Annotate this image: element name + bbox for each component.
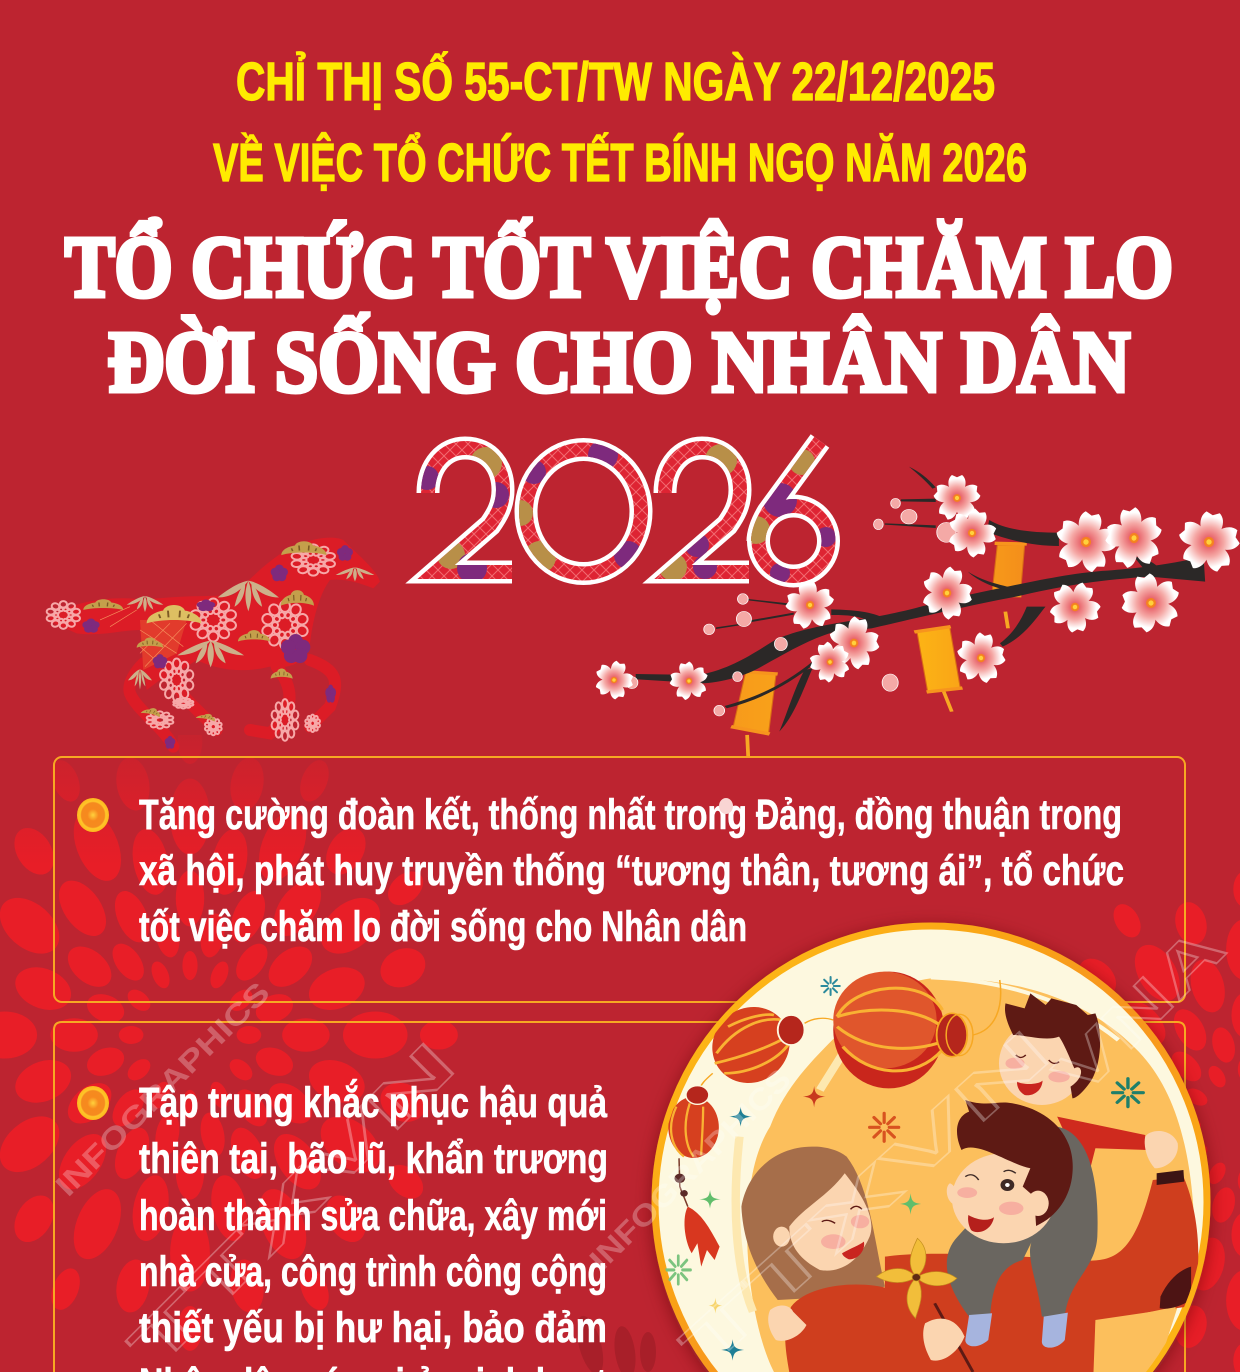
background red petal pattern — [0, 719, 1240, 1372]
lanterns — [668, 972, 973, 1267]
main title — [65, 218, 1173, 410]
text block: second point: Tập trung khắc phục hậu quả — [139, 1078, 608, 1127]
sparkles — [666, 977, 1143, 1361]
father head — [947, 1100, 1073, 1243]
icon: bullet — [77, 798, 109, 832]
watermarks: INFOGRAPHICS — [584, 1063, 798, 1277]
text block: second point: nhà cửa, công trình công cộng — [139, 1248, 607, 1296]
medallion circle — [655, 926, 1207, 1372]
heading: directive title: CHỈ THỊ SỐ 55-CT/TW NGÀY 22/12/2025 — [236, 52, 995, 112]
horse illustration — [46, 538, 380, 749]
boy — [947, 993, 1178, 1348]
text block: second point — [139, 1078, 608, 1372]
text block: second point: hoàn thành sửa chữa, xây mới — [139, 1192, 607, 1240]
watermarks: INFOGRAPHICS — [50, 976, 277, 1203]
pinwheel — [877, 1238, 957, 1318]
decorative year 2026 — [415, 440, 836, 583]
falling petal — [719, 798, 733, 814]
illustration: lanterns and family — [666, 972, 1198, 1372]
watermarks: VNA — [1041, 913, 1238, 1110]
main title: ĐỜI SỐNG CHO NHÂN DÂN — [108, 313, 1130, 410]
text block: first point: tốt việc chăm lo đời sống cho Nhân dân — [139, 903, 747, 951]
text block: first point — [139, 791, 1124, 951]
family illustration medallion — [655, 926, 1207, 1372]
orange backdrop — [747, 978, 1195, 1372]
watermarks — [50, 913, 1238, 1372]
branch wood — [636, 467, 1205, 732]
mother — [741, 1147, 973, 1372]
buds — [626, 498, 956, 716]
blossoms — [588, 475, 1240, 705]
heading: directive title — [213, 52, 1027, 193]
icon: bullet — [77, 1086, 109, 1120]
plum blossom branch with scrolls — [588, 467, 1240, 757]
panel: first directive point — [54, 757, 1185, 1002]
father body — [885, 1170, 1198, 1372]
text block: second point: thiên tai, bão lũ, khẩn trương — [139, 1135, 608, 1183]
text block: second point: thiết yếu bị hư hại, bảo đảm — [139, 1304, 607, 1352]
panel: second directive point — [54, 1022, 1185, 1372]
hanging scrolls — [731, 543, 1027, 757]
